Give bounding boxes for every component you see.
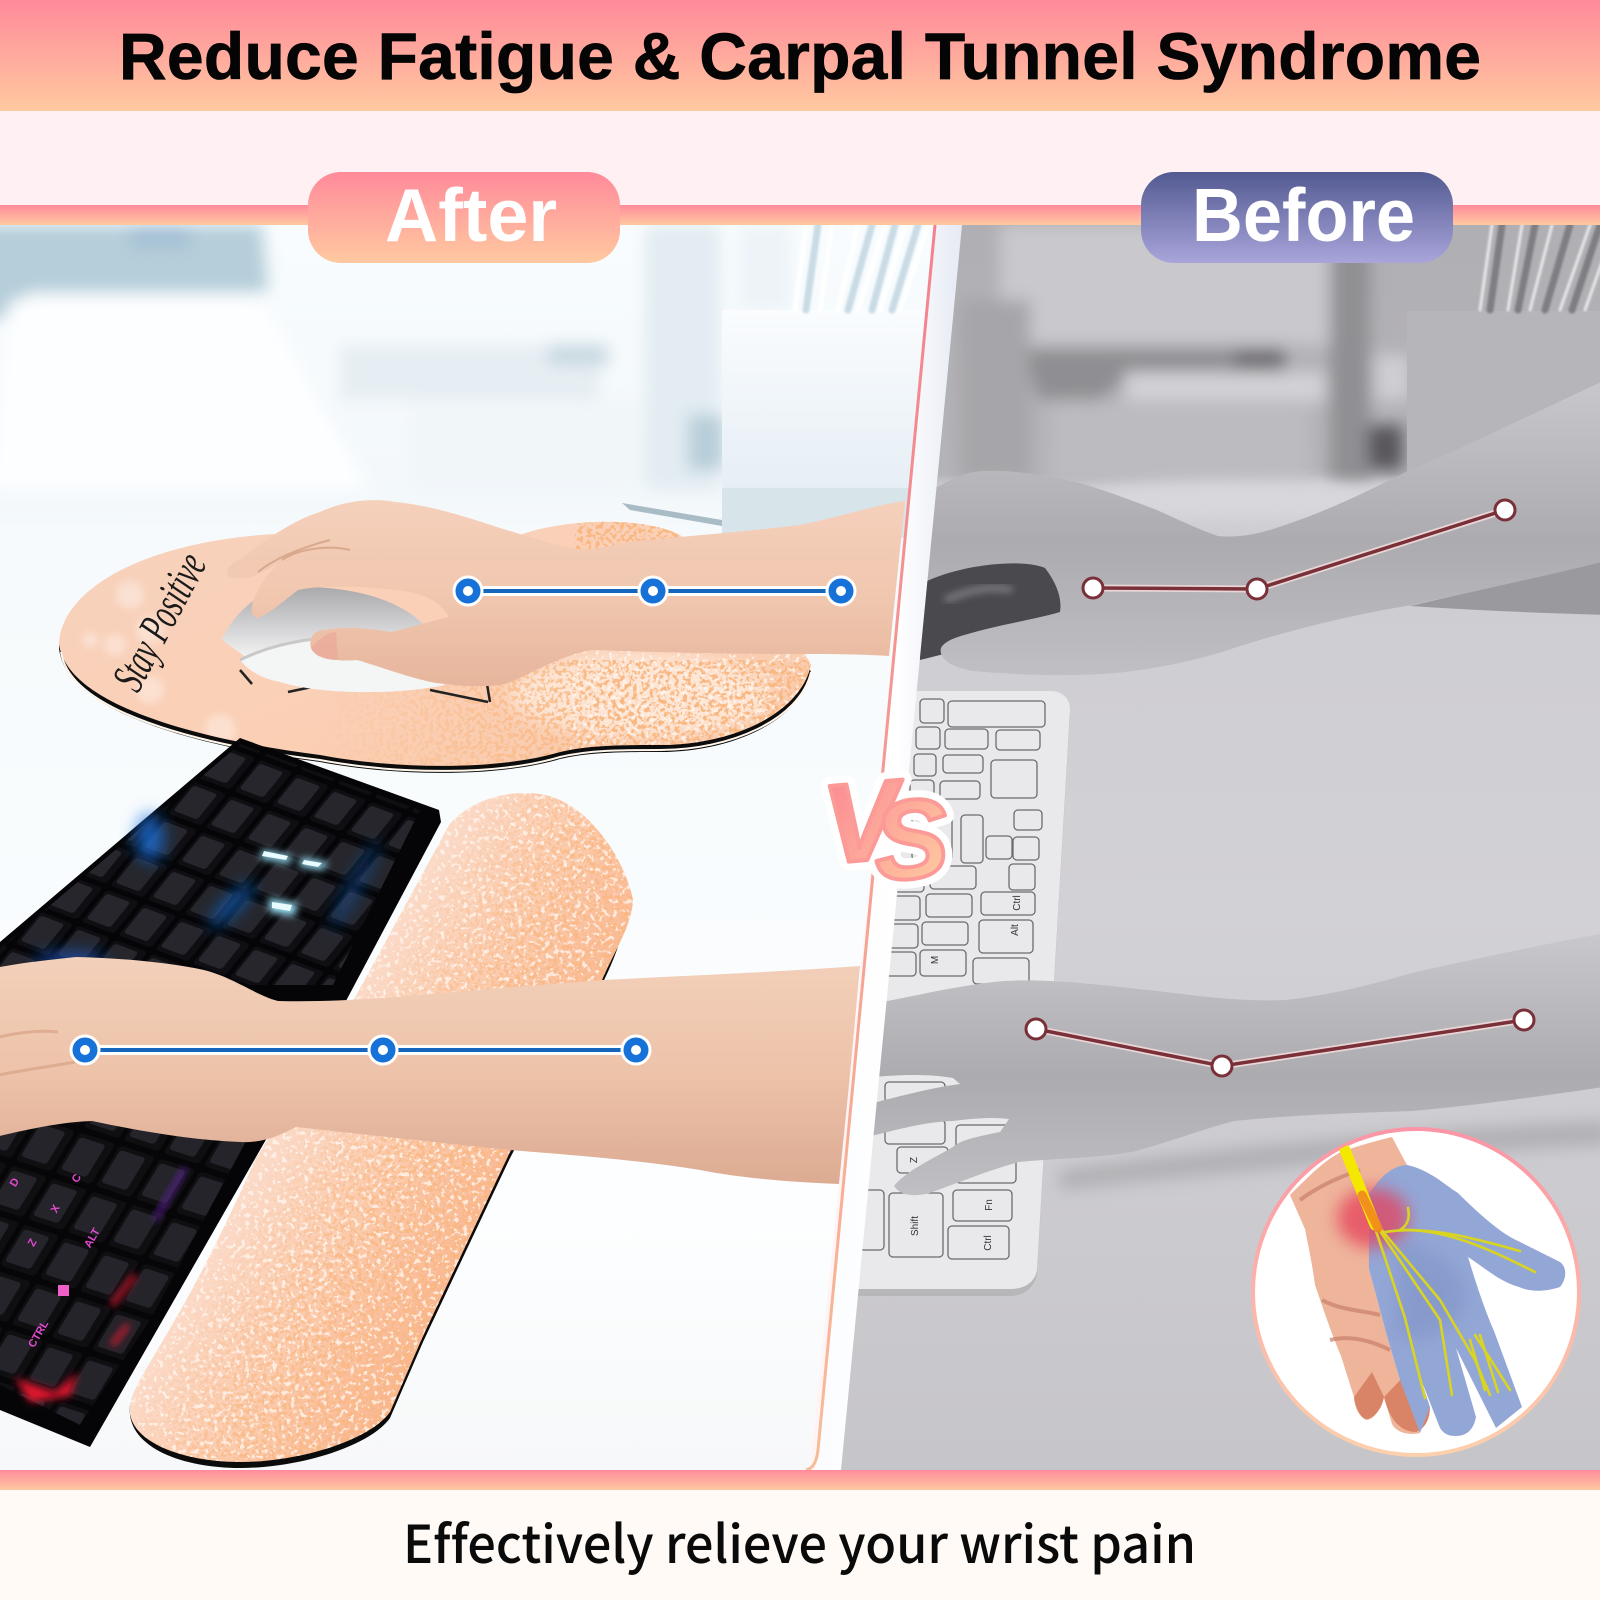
keyboard key labels: X xyxy=(49,1202,63,1215)
upper posture line xyxy=(454,577,855,605)
title: Reduce Fatigue & Carpal Tunnel Syndrome xyxy=(119,19,1481,93)
inset: hand nerve diagram xyxy=(1253,1129,1579,1455)
footer background xyxy=(0,1490,1600,1600)
lower grey arm and fingers xyxy=(858,932,1600,1195)
before label pill: Before xyxy=(1192,173,1415,257)
white keyboard key labels: Ctrl xyxy=(983,1235,994,1251)
desk surface highlights xyxy=(1100,474,1382,515)
white keyboard xyxy=(840,691,1070,1296)
keyboard key labels: D xyxy=(8,1176,22,1189)
upper grey arm with thumb xyxy=(905,378,1600,675)
hand skin xyxy=(227,500,905,686)
white keyboard key labels: Ctrl xyxy=(1012,895,1023,911)
VS badge: VS xyxy=(818,752,953,909)
hand blue side xyxy=(1369,1165,1565,1436)
mechanical keyboard xyxy=(0,738,441,1447)
white pen holder box xyxy=(622,310,937,538)
VS badge: VS xyxy=(818,752,953,909)
pain glow xyxy=(1337,1188,1409,1248)
lower red posture line xyxy=(1026,1010,1534,1076)
panel: before photo scene xyxy=(830,225,1600,1470)
arm and hand on keyboard, with support xyxy=(0,957,860,1184)
footer strip xyxy=(0,1470,1600,1490)
arm and hand on mouse, with support xyxy=(222,500,905,692)
keyboard key labels xyxy=(8,1172,103,1350)
sub-header pale band xyxy=(0,111,1600,205)
after label pill xyxy=(308,172,620,263)
pad artwork marks xyxy=(240,670,490,702)
keyboard key labels: Z xyxy=(26,1237,40,1249)
upper red posture line xyxy=(1083,500,1515,599)
white keyboard key labels: Shift xyxy=(910,1216,921,1236)
finger separations xyxy=(0,1031,75,1076)
keyboard wrist rest xyxy=(120,780,650,1470)
white keyboard key labels: Fn xyxy=(984,1199,995,1211)
dark mouse xyxy=(920,563,1060,660)
thumb nail xyxy=(311,632,338,660)
keyboard key labels: C xyxy=(70,1172,84,1185)
pens xyxy=(795,225,928,310)
keyboard key labels: ALT xyxy=(82,1226,103,1250)
white keyboard key labels xyxy=(909,895,1023,1251)
after label pill: After xyxy=(385,173,557,257)
diagonal pink divider line xyxy=(806,225,935,1470)
shadow under upper arm xyxy=(1410,560,1600,615)
grey table shadow xyxy=(1060,1120,1600,1190)
hand skin side xyxy=(1290,1137,1420,1434)
lower posture line xyxy=(71,1036,650,1064)
diagonal white divider band xyxy=(815,225,962,1470)
pad slogan: Stay Positive xyxy=(102,544,216,699)
finger definition xyxy=(258,540,350,572)
white keyboard key labels: Z xyxy=(909,1157,920,1163)
grey pens xyxy=(1480,225,1600,310)
mouse pad xyxy=(59,522,812,773)
header background xyxy=(0,0,1600,111)
median nerve xyxy=(1375,1208,1535,1398)
grey pen holder box xyxy=(1407,358,1416,472)
label strip xyxy=(0,205,1600,225)
panel: after photo scene xyxy=(0,225,940,1470)
blurred office background xyxy=(0,225,790,490)
footer caption: Effectively relieve your wrist pain xyxy=(403,1503,1196,1578)
blurred grey office xyxy=(960,225,1410,485)
white keyboard key labels: Alt xyxy=(1010,924,1021,936)
wireless mouse xyxy=(222,587,445,692)
fingertips skin xyxy=(1354,1372,1430,1432)
keyboard key labels: CTRL xyxy=(26,1318,51,1350)
white keyboard key labels: M xyxy=(930,956,941,964)
